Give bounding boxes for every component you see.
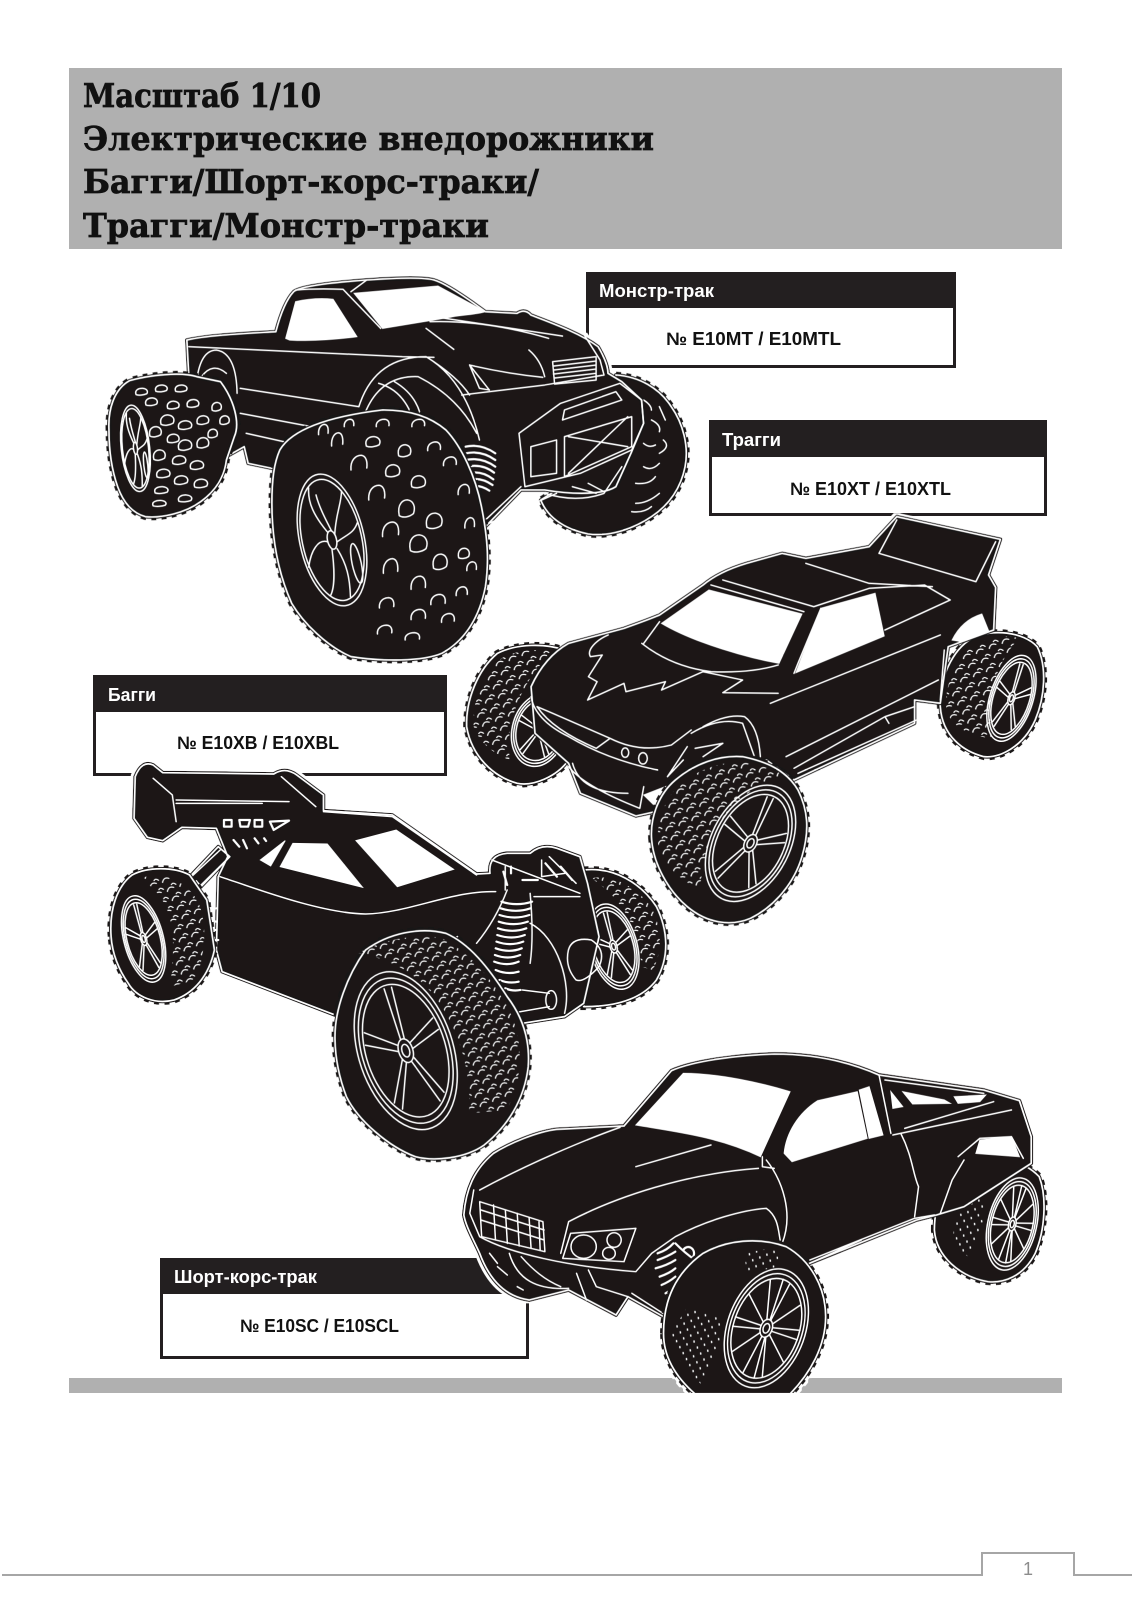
body lines — [470, 1075, 1023, 1315]
rear tyre rim — [985, 1176, 1040, 1271]
vehicle: short course truck — [464, 1054, 1046, 1395]
bottom grey bar — [69, 1378, 1062, 1393]
rear tyre — [940, 633, 1045, 757]
front spring — [656, 1243, 695, 1293]
title: types line one: Багги/Шорт-корс-траки/ — [83, 162, 540, 201]
truggy body — [531, 517, 1000, 816]
truck body — [464, 1054, 1031, 1317]
near front tyre — [335, 931, 528, 1159]
label box: buggy: Багги — [108, 685, 156, 705]
rear tyre rim — [978, 651, 1045, 745]
label box: short course truck — [160, 1258, 529, 1358]
rear tyre — [934, 1158, 1046, 1282]
near front tyre — [651, 756, 813, 923]
page number: 1 — [1023, 1559, 1033, 1579]
rear rim — [117, 404, 154, 493]
vehicle: truggy — [467, 517, 1045, 923]
body lines — [189, 280, 622, 525]
title panel — [69, 68, 1062, 249]
front shock spring — [494, 863, 572, 991]
near front tyre — [664, 1241, 826, 1395]
headlights — [622, 748, 629, 757]
near tyre tread — [658, 762, 786, 890]
roll cage openings — [891, 1092, 986, 1108]
windshield — [636, 1073, 790, 1157]
label box: monster truck: № E10MT / E10MTL — [666, 329, 841, 349]
far tyre rim — [505, 690, 573, 770]
rear quarter window — [859, 1087, 883, 1138]
grille — [480, 1202, 545, 1252]
label box: truggy — [709, 420, 1047, 514]
grille — [553, 357, 596, 384]
label box: short course truck: № E10SC / E10SCL — [240, 1316, 399, 1336]
body, wing and shock lines — [153, 777, 602, 1013]
near front tyre — [272, 410, 487, 660]
front air gap — [644, 787, 665, 807]
footer line with page tab — [2, 1553, 1132, 1575]
near tyre tread — [671, 1247, 778, 1387]
rear wheel arch opening — [976, 1137, 1019, 1157]
rear tyre — [111, 869, 214, 1001]
truck body — [187, 278, 644, 527]
shock mount ellipse — [546, 991, 557, 1009]
rear tyre tread — [140, 876, 204, 987]
windows — [280, 843, 362, 887]
label box: buggy: № E10XB / E10XBL — [177, 733, 339, 753]
far tyre tread — [474, 650, 553, 760]
far front tyre — [580, 870, 666, 1007]
hood flame and body lines — [531, 520, 996, 808]
buggy body and wing — [134, 764, 602, 1023]
label box: monster truck: Монстр-трак — [599, 281, 715, 301]
rear tyre tread — [946, 637, 1019, 738]
near tyre rim — [337, 962, 475, 1139]
rear wheel opening — [952, 614, 989, 642]
title: category: Электрические внедорожники — [83, 119, 654, 158]
windshield — [662, 590, 802, 663]
vehicle: monster truck — [109, 278, 686, 660]
front bumper — [519, 383, 644, 487]
far tyre tread — [591, 877, 660, 970]
front spring — [466, 446, 495, 491]
side window — [796, 593, 884, 673]
label box: buggy — [93, 675, 446, 774]
rear tread — [136, 385, 229, 506]
wing stay details — [201, 820, 289, 940]
near tyre tread — [358, 936, 520, 1113]
rear tyre — [109, 374, 237, 517]
rear tyre rim — [114, 892, 174, 986]
far front tyre — [541, 375, 686, 535]
windshield — [354, 286, 485, 328]
label box: truggy: Трагги — [722, 430, 781, 450]
label box: short course truck: Шорт-корс-трак — [174, 1267, 318, 1287]
near rim — [286, 470, 378, 610]
headlight — [563, 1228, 636, 1262]
label box: truggy: № E10XT / E10XTL — [790, 479, 951, 499]
side window — [286, 299, 357, 340]
far tyre rim — [580, 900, 647, 993]
vehicle: buggy — [111, 764, 666, 1159]
near tyre rim — [688, 775, 813, 912]
side window — [784, 1092, 867, 1162]
near tread lugs — [318, 419, 476, 640]
title: scale: Масштаб 1/10 — [83, 76, 321, 115]
title: types line two: Трагги/Монстр-траки — [83, 206, 489, 245]
far front tyre — [467, 645, 573, 784]
label box: monster truck — [586, 272, 956, 366]
rear tyre tread — [953, 1199, 984, 1256]
near tyre rim — [723, 1268, 810, 1389]
